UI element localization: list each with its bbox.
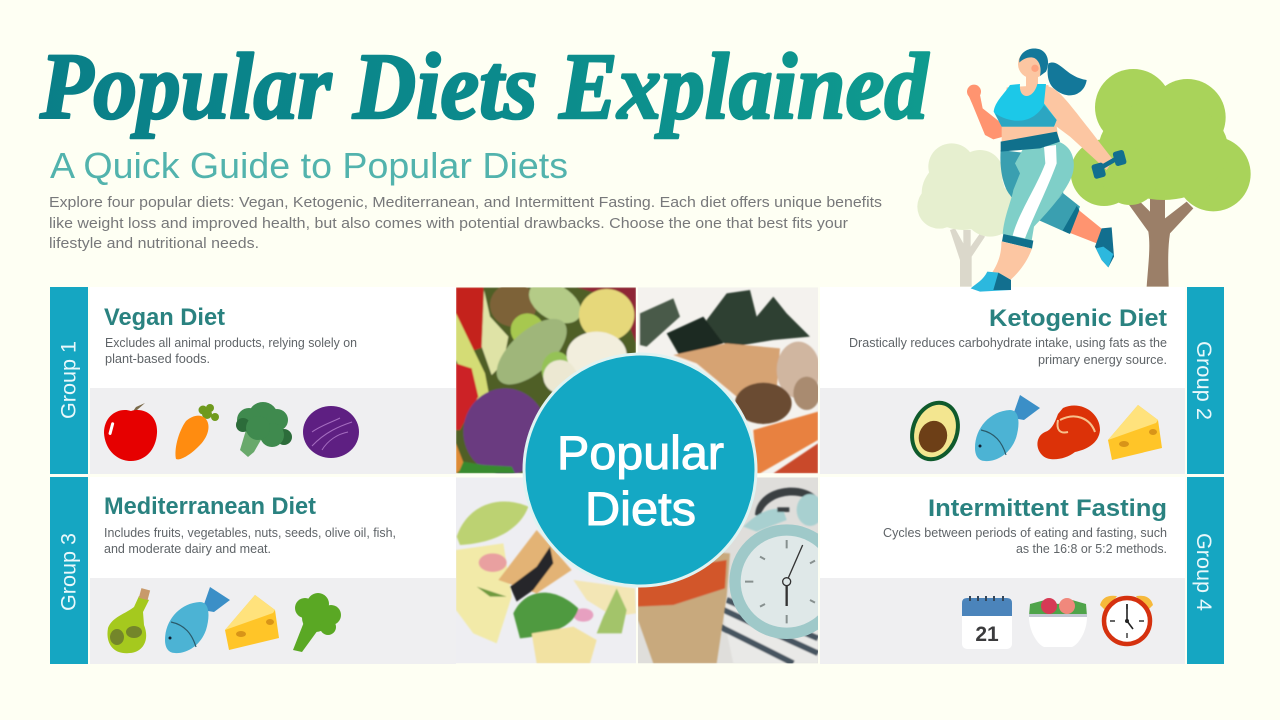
icon: olive oil bottle (107, 588, 150, 653)
sports bra (994, 84, 1057, 127)
intro text: like weight loss and improved health, but also comes with potential drawbacks. Choose the one that best fits your (49, 215, 848, 232)
icon: alarm clock (1100, 596, 1153, 644)
description: Includes fruits, vegetables, nuts, seeds, olive oil, fish, (104, 526, 396, 540)
ponytail (1048, 62, 1087, 95)
torso (1002, 85, 1058, 142)
photo: salad (456, 477, 636, 663)
icon: steak (1037, 405, 1100, 459)
center photo collage (456, 273, 844, 663)
illustration: runner and trees (917, 48, 1251, 292)
icon: pale tree (917, 143, 1017, 287)
panel: Group 2 Ketogenic Diet (820, 287, 1224, 474)
icon: salad bowl (1029, 598, 1087, 647)
icon: green tree (1071, 69, 1251, 287)
icon: calendar: 21 (975, 623, 999, 646)
photo: alarm clock and meal (638, 478, 818, 664)
intro text: Explore four popular diets: Vegan, Ketogenic, Mediterranean, and Intermittent Fasting. Each diet offers unique benefits (49, 194, 882, 211)
description (104, 526, 396, 556)
raised arm (968, 95, 1003, 139)
icon: cheese (1108, 405, 1162, 460)
panel: Group 3 Mediterranean Diet (50, 477, 456, 664)
photo: vegetables (456, 273, 636, 475)
icon: purple cabbage (303, 406, 359, 458)
description: Excludes all animal products, relying solely on (105, 336, 357, 350)
heading: Vegan Diet (104, 304, 225, 331)
icon: cheese (225, 595, 279, 650)
near leg (992, 241, 1032, 282)
near arm (1047, 86, 1113, 170)
description (883, 526, 1167, 556)
description (105, 336, 357, 366)
group label: Group 2 (1192, 341, 1215, 420)
subtitle: A Quick Guide to Popular Diets (50, 145, 568, 186)
description: as the 16:8 or 5:2 methods. (1016, 542, 1167, 556)
head (1018, 50, 1047, 78)
panel: Group 1 Vegan Diet (50, 287, 456, 474)
far leg (1067, 208, 1103, 243)
group label: Group 1 (58, 341, 80, 419)
description: Drastically reduces carbohydrate intake, using fats as the (849, 336, 1167, 350)
description: plant-based foods. (105, 352, 210, 366)
description: and moderate dairy and meat. (104, 542, 271, 556)
icon: carrot (175, 404, 219, 459)
heading: Ketogenic Diet (989, 305, 1167, 332)
icon: apple (104, 403, 157, 461)
icon: jogging woman (967, 48, 1127, 292)
group label: Group 3 (58, 533, 80, 611)
icon: avocado (902, 394, 968, 468)
title: Popular Diets Explained (39, 35, 930, 139)
group label: Group 4 (1192, 533, 1215, 611)
leggings (1000, 150, 1063, 220)
icon: fish (165, 587, 230, 653)
badge label (557, 426, 724, 535)
icon: calendar (962, 596, 1012, 649)
photo: roast meat and vegetables (638, 287, 820, 473)
center circle badge (524, 354, 756, 586)
icon: fish (975, 395, 1040, 461)
intro text: lifestyle and nutritional needs. (49, 235, 259, 252)
intro text (49, 194, 882, 252)
description (849, 336, 1167, 367)
description: primary energy source. (1038, 353, 1167, 367)
icon: broccoli (236, 402, 292, 457)
panel: Group 4 Intermittent Fasting (820, 477, 1224, 664)
badge label: Popular (557, 426, 724, 479)
description: Cycles between periods of eating and fasting, such (883, 526, 1167, 540)
heading: Mediterranean Diet (104, 493, 316, 520)
heading: Intermittent Fasting (928, 495, 1167, 522)
icon: green broccoli (293, 593, 341, 652)
badge label: Diets (585, 482, 696, 535)
